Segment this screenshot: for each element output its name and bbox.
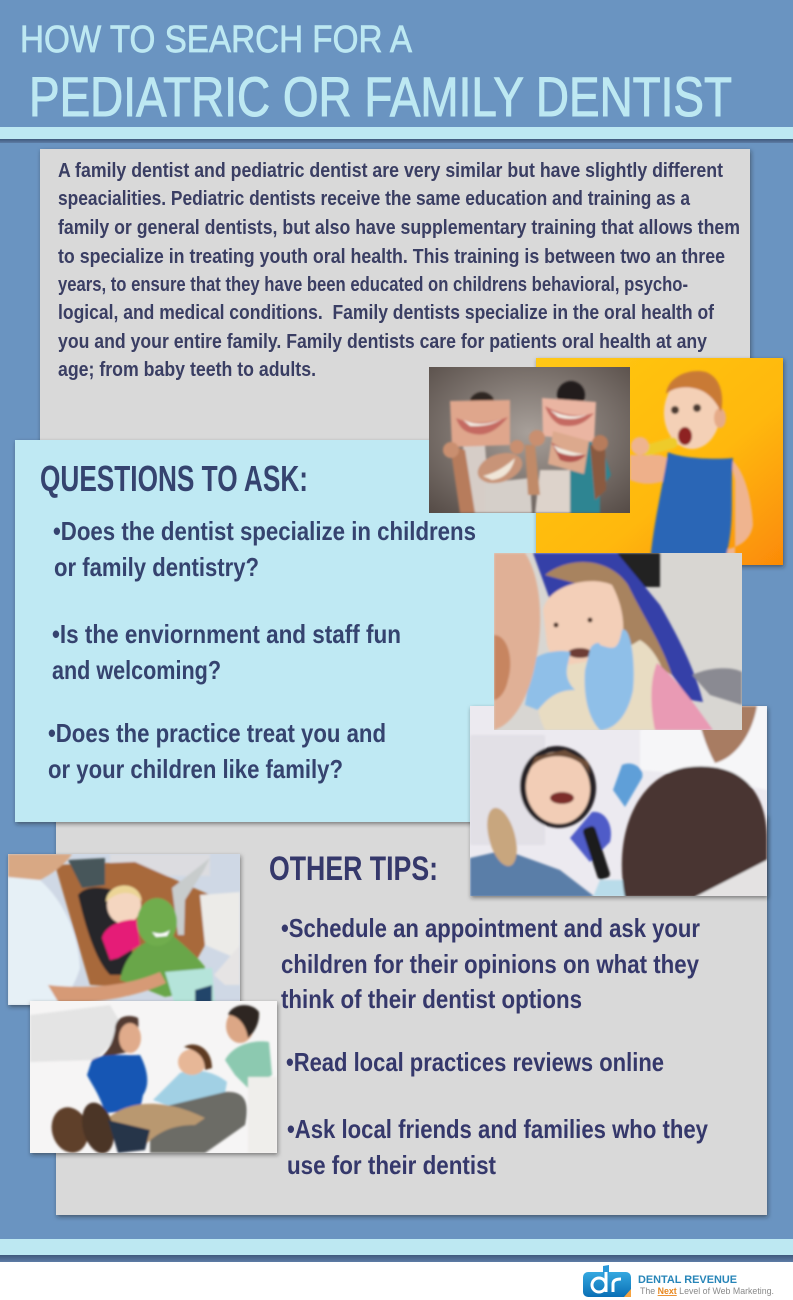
logo wordmark: DENTAL REVENUE [638,1274,737,1286]
tips list: •Ask local friends and families who they [287,1114,708,1144]
tips list: •Read local practices reviews online [286,1047,664,1077]
intro text [58,160,740,381]
intro text: you and your entire family. Family dentists care for patients oral health at any [58,331,708,353]
top divider band [0,127,793,143]
footer strip [0,1262,793,1300]
intro text: A family dentist and pediatric dentist are very similar but have slightly different [58,160,723,182]
icon: dr badge [583,1265,631,1297]
questions list: and welcoming? [52,655,221,685]
intro text: logical, and medical conditions. Family dentists specialize in the oral health of [58,302,714,324]
questions list [48,516,476,784]
photo: boy brushing teeth on yellow [536,358,783,565]
tips list: use for their dentist [287,1150,496,1180]
tips list: children for their opinions on what they [281,949,699,979]
other tips heading: OTHER TIPS: [269,850,438,888]
questions heading: QUESTIONS TO ASK: [40,458,308,499]
intro text: age; from baby teeth to adults. [58,359,316,381]
photo: girl smiling in hand mirror [470,706,767,897]
panel: other tips [56,815,767,1215]
intro text: to specialize in treating youth oral health. This training is between two an three [58,246,725,268]
photo: girl having teeth examined [494,553,742,730]
photo: toddler with stuffed frog [8,854,240,1005]
logo tagline: The Next Level of Web Marketing. [640,1286,774,1296]
questions list: •Does the dentist specialize in childrens [53,516,476,546]
questions list: •Is the enviornment and staff fun [52,619,401,649]
title banner [20,19,732,128]
panel: questions to ask [15,440,540,822]
intro text: years, to ensure that they have been educated on childrens behavioral, psycho- [58,274,688,296]
tips list: •Schedule an appointment and ask your [281,913,700,943]
photo: family with dentist and boy [30,1001,277,1157]
logo: Dental Revenue [583,1265,774,1297]
title line one: HOW TO SEARCH FOR A [20,19,413,61]
panel: introduction [40,149,750,449]
questions list: or your children like family? [48,754,343,784]
tips list: think of their dentist options [281,984,582,1014]
bottom divider band [0,1239,793,1262]
photo: family holding smile pictures [429,367,630,513]
tips list [281,913,708,1180]
questions list: or family dentistry? [54,552,259,582]
intro text: speacialities. Pediatric dentists receive the same education and training as a [58,188,691,210]
questions list: •Does the practice treat you and [48,718,386,748]
